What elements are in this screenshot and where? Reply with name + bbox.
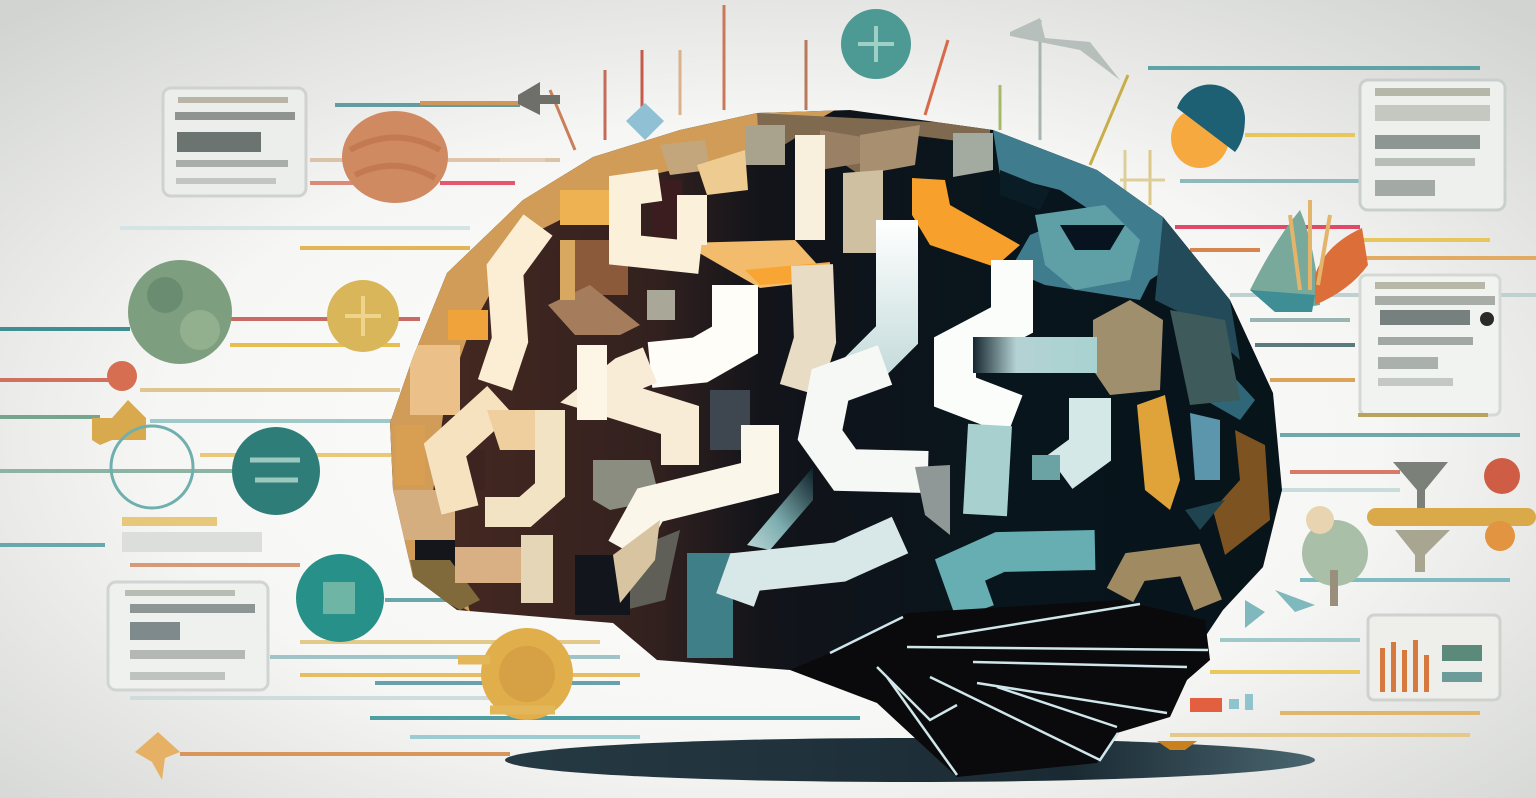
brain: dark grey mid blocks — [575, 290, 750, 658]
brain: cream ribbons left — [445, 135, 815, 603]
icon: gold bar right — [1367, 508, 1536, 526]
icon: dark tree right — [1393, 462, 1450, 572]
panel: middle right card — [1358, 275, 1500, 417]
brain — [380, 100, 1290, 777]
icon: teal diamonds right — [1245, 590, 1315, 628]
icon: yellow arrow bottom left — [135, 732, 180, 780]
icon: blue diamond top — [626, 103, 664, 140]
icon: red and teal mini label — [1190, 694, 1253, 712]
icon: red circle right — [1484, 458, 1520, 494]
brain: left tan rim — [390, 110, 835, 612]
icon: small red circle left — [107, 361, 137, 391]
icon: plant fan right — [1250, 200, 1368, 312]
icon: teal circle lower left — [296, 554, 384, 642]
brain: cerebellum — [790, 600, 1210, 777]
icon: gold coin — [458, 628, 573, 720]
icon: dark teal circle — [232, 427, 320, 515]
icon: yellow signpost left — [92, 400, 146, 445]
brain: orange accents — [682, 150, 1020, 288]
panel: top right card — [1360, 80, 1505, 210]
connector lines: right — [1148, 68, 1536, 735]
icon: orange circle right — [1485, 521, 1515, 551]
brain: teal right blocks — [993, 130, 1270, 555]
icon: outline circle — [111, 426, 193, 508]
connector lines: left — [0, 103, 860, 754]
icon: tree lower right — [1302, 506, 1368, 606]
brain: top tan right blocks — [843, 125, 993, 253]
icon: teal top circle — [841, 9, 911, 79]
icon: green tree circle — [128, 260, 232, 364]
icon: top right marker — [1010, 18, 1120, 80]
icon: orange marker on shadow — [1157, 741, 1197, 750]
icon: orange brain circle — [342, 111, 448, 203]
panel: bottom right chart card — [1368, 615, 1500, 700]
icon: arrow top left — [518, 82, 560, 115]
panel: lower left card — [108, 582, 268, 690]
panel: top left card — [163, 88, 306, 196]
brain: pale ribbons centre — [735, 220, 1208, 612]
brain: top brown strip — [757, 113, 990, 175]
icon: blue and yellow pie — [1171, 85, 1245, 168]
ground shadow — [505, 738, 1315, 782]
panel: lower left caption — [122, 517, 262, 552]
brain base — [380, 100, 1290, 700]
brain: left tan blocks — [393, 125, 880, 610]
icon: yellow circle — [327, 280, 399, 352]
connector lines: top — [550, 5, 1165, 210]
